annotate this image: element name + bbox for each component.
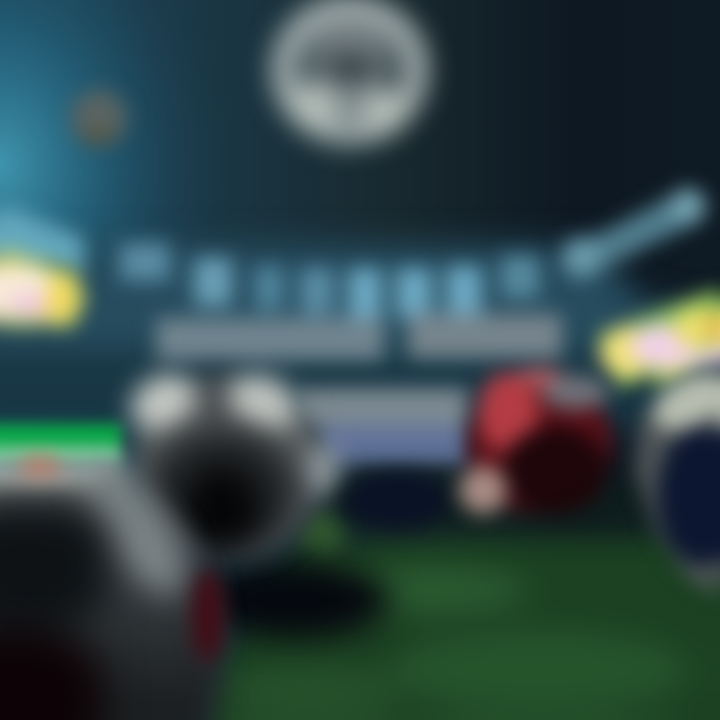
lower stand panel [300,388,470,466]
ball shadow on grass [200,562,390,638]
left floodlight screen [0,248,86,328]
stadium stands band [0,245,720,430]
right foreground ball [634,362,720,595]
right floodlight screen [598,288,720,388]
left stand light bar [0,205,84,272]
green pitch strip at left [0,424,122,464]
grass patch beside centre ball [300,511,344,559]
centre soccer ball [121,362,340,556]
grass pitch [190,530,720,720]
crest emblem at top [284,0,416,136]
red ball [459,368,612,514]
right stand light bar [562,188,706,278]
stadium lettering blocks [120,243,562,360]
left foreground ball [0,451,224,720]
dark floor behind balls [320,480,660,525]
navy ball in the distance [342,472,450,528]
small distant ball [71,90,127,146]
